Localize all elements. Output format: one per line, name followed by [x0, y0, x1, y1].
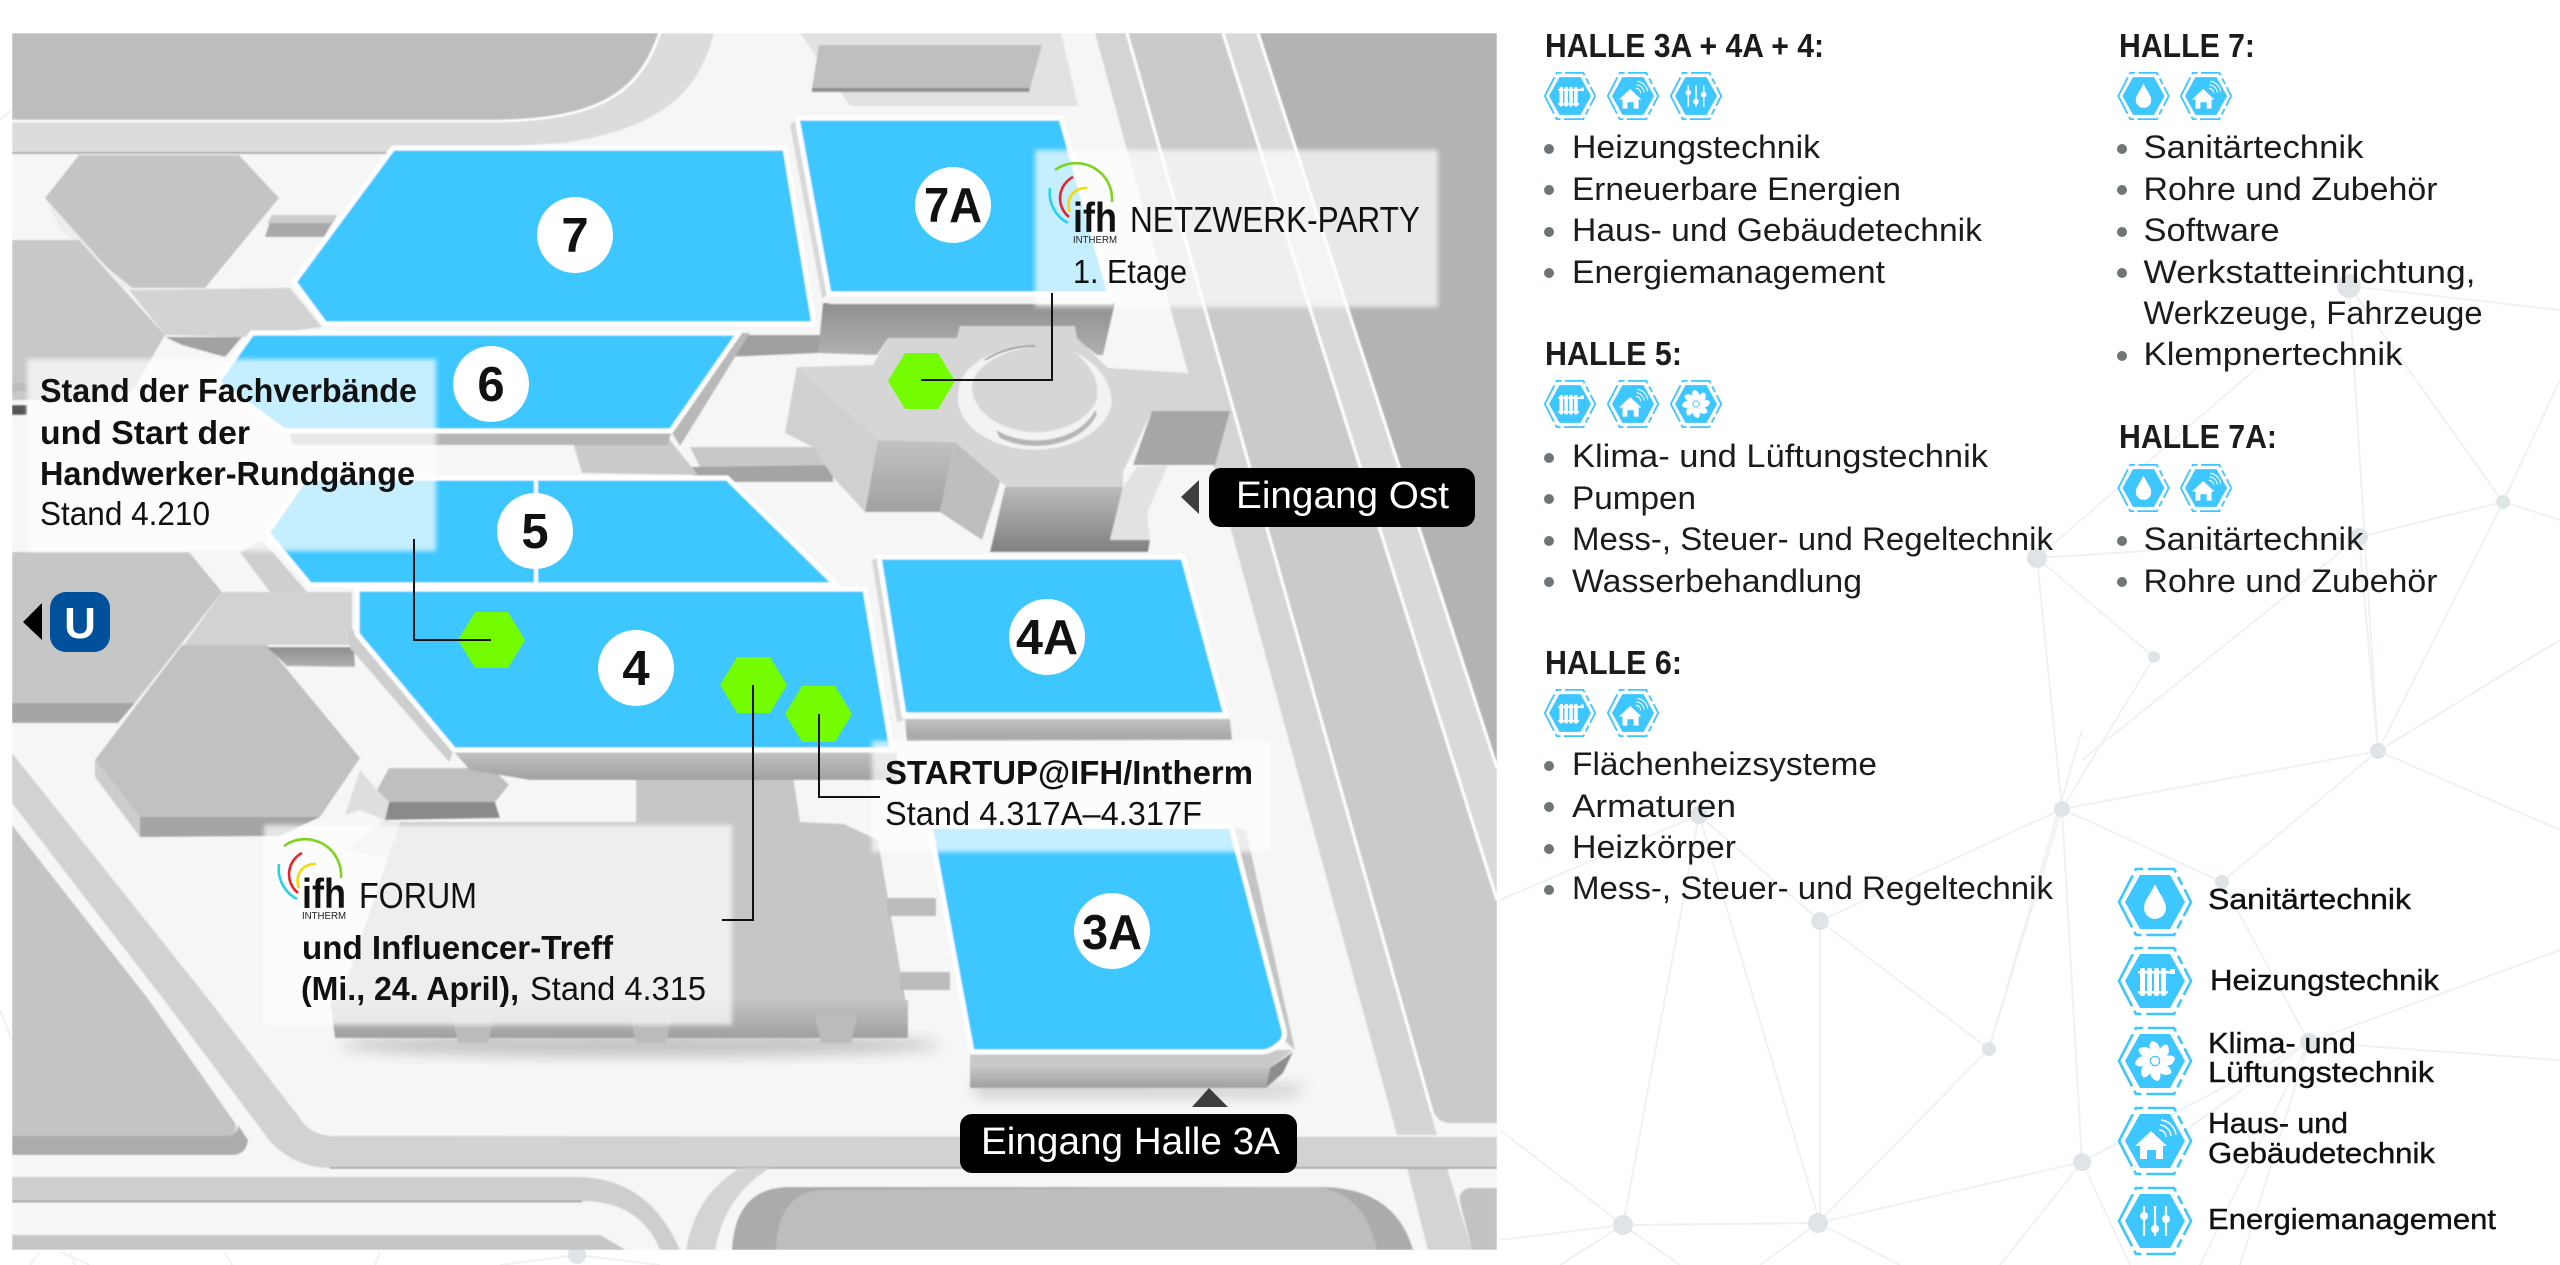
- section: Halle 3A + 4A + 4: [1544, 27, 1983, 290]
- callout: netzwerk-party: 1. Etage: [1073, 253, 1187, 290]
- section: Halle 6: [1544, 644, 2054, 906]
- green marker: forum: [720, 657, 787, 713]
- callout: fachverbaende: Stand der Fachverbände: [40, 372, 417, 409]
- hall number 4: 4: [622, 642, 650, 696]
- hall number 5: 5: [521, 505, 549, 559]
- legend item: Energiemanagement: [2119, 1188, 2496, 1254]
- section: Halle 7A: Rohre und Zubehör: [2144, 563, 2438, 599]
- section: Halle 6: HALLE 6:: [1545, 644, 1682, 681]
- hall number 6: [453, 346, 529, 422]
- section: Halle 3A + 4A + 4: Haus- und Gebäudetechnik: [1572, 212, 1983, 248]
- section: Halle 7A: Sanitärtechnik: [2144, 521, 2365, 557]
- hall number 6: 6: [477, 358, 505, 412]
- section: Halle 6: Armaturen: [1572, 788, 1736, 824]
- section: Halle 3A + 4A + 4: HALLE 3A + 4A + 4:: [1545, 27, 1824, 64]
- callout: forum: Stand 4.315: [530, 970, 706, 1007]
- section: Halle 7: Rohre und Zubehör: [2144, 171, 2438, 207]
- section: Halle 7: HALLE 7:: [2119, 27, 2255, 64]
- U-Bahn sign: U: [64, 599, 96, 648]
- callout: forum: FORUM: [359, 875, 477, 916]
- callout: netzwerk-party: NETZWERK-PARTY: [1130, 199, 1420, 240]
- callout: fachverbaende: [27, 359, 436, 551]
- section: Halle 7A: [2117, 418, 2438, 599]
- central entrance building: [572, 303, 1230, 552]
- section: Halle 6: Mess-, Steuer- und Regeltechnik: [1572, 870, 2054, 906]
- label: Eingang Halle 3A: [960, 1088, 1297, 1173]
- section: Halle 7: Sanitärtechnik: [2144, 129, 2365, 165]
- legend item: Energiemanagement: Energiemanagement: [2208, 1204, 2496, 1236]
- hall number 3A: 3A: [1082, 906, 1142, 960]
- right roads: [1095, 33, 1497, 1250]
- legend item: Haus- und Gebaeudetechnik: [2119, 1108, 2436, 1174]
- section: Halle 5: Mess-, Steuer- und Regeltechnik: [1572, 521, 2054, 557]
- top building: [800, 33, 1078, 106]
- callout: forum: [264, 825, 732, 1025]
- legend: [2119, 869, 2496, 1254]
- hall number 4A: [1009, 599, 1085, 675]
- hall 3A plinth: [970, 826, 1310, 1097]
- section: Halle 7: [2117, 27, 2482, 372]
- callout: fachverbaende: und Start der: [40, 414, 250, 451]
- hall number 4A: 4A: [1016, 611, 1078, 665]
- label: Eingang Halle 3A: Eingang Halle 3A: [981, 1121, 1281, 1163]
- hall 4A: [879, 557, 1226, 715]
- U-Bahn sign: [23, 592, 110, 652]
- section: Halle 7: Klempnertechnik: [2144, 336, 2404, 372]
- section: Halle 5: Klima- und Lüftungstechnik: [1572, 438, 1989, 474]
- legend item: Haus- und Gebaeudetechnik: Gebäudetechnik: [2208, 1138, 2436, 1170]
- hall 5: [267, 478, 836, 585]
- section: Halle 5: Pumpen: [1572, 480, 1696, 516]
- callout: startup: STARTUP@IFH/Intherm: [885, 754, 1253, 791]
- bottom roads and left block: [12, 753, 1497, 1250]
- label: Eingang Ost: [1181, 468, 1475, 527]
- section: Halle 3A + 4A + 4: Erneuerbare Energien: [1572, 171, 1901, 207]
- hall number 4: [598, 630, 674, 706]
- legend item: Sanitaertechnik: Sanitärtechnik: [2208, 884, 2412, 916]
- legend item: Klima- und Lueftungstechnik: Klima- und: [2208, 1028, 2356, 1060]
- callout: forum: und Influencer-Treff: [302, 929, 614, 966]
- hall number 7A: 7A: [924, 179, 982, 233]
- section: Halle 6: Heizkörper: [1572, 829, 1736, 865]
- hall number 5: [497, 493, 573, 569]
- green marker: startup: [785, 686, 852, 742]
- section: Halle 5: [1544, 335, 2054, 599]
- section: Halle 5: HALLE 5:: [1545, 335, 1682, 372]
- callout: netzwerk-party: [1035, 150, 1438, 307]
- legend item: Klima- und Lueftungstechnik: [2119, 1028, 2435, 1094]
- callout: startup: Stand 4.317A–4.317F: [885, 795, 1202, 832]
- hall side walls: [290, 118, 1232, 780]
- green marker: netzwerk-party: [888, 353, 955, 409]
- site map panel: [12, 33, 1497, 1250]
- hall number 7: [537, 197, 613, 273]
- hall number 7: 7: [561, 209, 589, 263]
- legend item: Sanitaertechnik: [2119, 869, 2412, 935]
- label: Eingang Ost: Eingang Ost: [1236, 475, 1449, 517]
- legend item: Heizungstechnik: Heizungstechnik: [2210, 965, 2440, 997]
- callout: fachverbaende: Stand 4.210: [40, 495, 210, 532]
- hall number 7A: [915, 167, 991, 243]
- section: Halle 6: Flächenheizsysteme: [1572, 746, 1877, 782]
- section: Halle 7: Werkstatteinrichtung,: [2144, 254, 2476, 290]
- leader lines: [414, 293, 1052, 920]
- top-left road and block: [12, 33, 714, 153]
- section: Halle 5: Wasserbehandlung: [1572, 563, 1862, 599]
- legend item: Haus- und Gebaeudetechnik: Haus- und: [2208, 1108, 2348, 1140]
- hall 7A: [797, 118, 1110, 294]
- hall number 3A: [1074, 893, 1150, 969]
- section: Halle 7A: HALLE 7A:: [2119, 418, 2277, 455]
- left buildings: [12, 155, 509, 860]
- section: Halle 7: Software: [2144, 212, 2280, 248]
- section: Halle 3A + 4A + 4: Heizungstechnik: [1572, 129, 1821, 165]
- hall 3A: [930, 826, 1284, 1052]
- hall 7: [294, 148, 814, 324]
- hall 4: [357, 589, 892, 750]
- section: Halle 3A + 4A + 4: Energiemanagement: [1572, 254, 1885, 290]
- callout: startup: [872, 741, 1270, 852]
- callout: fachverbaende: Handwerker-Rundgänge: [40, 455, 415, 492]
- legend item: Heizungstechnik: [2119, 948, 2440, 1014]
- section: Halle 7: Werkzeuge, Fahrzeuge: [2144, 295, 2482, 331]
- forum building: [330, 770, 950, 1057]
- legend item: Klima- und Lueftungstechnik: Lüftungstechnik: [2208, 1057, 2435, 1089]
- green marker: fachverbaende: [458, 612, 525, 668]
- callout: forum: (Mi., 24. April),: [301, 970, 519, 1007]
- hall 5 divider: [534, 478, 538, 585]
- hall 6: [217, 333, 739, 431]
